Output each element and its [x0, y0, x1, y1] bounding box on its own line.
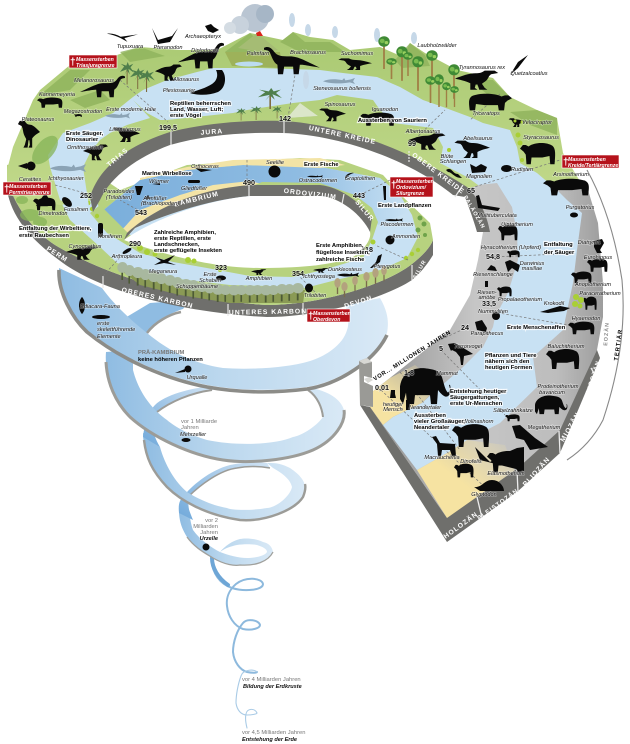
event captions: erste Reptilien, erste: [154, 236, 212, 242]
species labels: Diplodocus: [191, 48, 219, 54]
event captions: Säugergattungen,: [450, 395, 500, 401]
volcano with smoke: [224, 4, 417, 118]
spiral captions: vor 1 Milliarde: [181, 419, 217, 425]
grey Tertiary land: [370, 180, 603, 518]
species labels: Liliensternus: [109, 127, 141, 133]
species labels: Albertosaurus: [405, 129, 440, 135]
mass extinction tag: Trias/Jura: †: [70, 57, 76, 68]
upper land mass with mountains: [7, 32, 587, 210]
species labels: Anoplotherium: [574, 282, 611, 288]
mass extinction tag: Perm/Trias: [3, 182, 51, 196]
yellow-green bushes: [86, 200, 420, 272]
period labels on ribbons: TERTIÄR: [613, 328, 624, 361]
species labels: Melanorosaurus: [74, 78, 114, 84]
event captions: Erste Amphibien,: [316, 243, 364, 249]
green scrub at left: [16, 131, 63, 227]
species labels: Schaben: [199, 278, 221, 284]
mass extinction tag: Ordovizium/Silur: Silurgrenze: [396, 191, 424, 197]
age numbers: 323: [215, 263, 227, 272]
lower spiral: thin tail to the origin of the Earth: [212, 558, 263, 728]
species labels: Macrauchenia: [424, 455, 460, 461]
lower spiral: third ring, back and front: [143, 433, 305, 520]
species labels: Mensch: [383, 407, 403, 413]
species labels: Urzelle: [200, 536, 218, 542]
age numbers: 24: [461, 323, 469, 332]
species labels: Diatryma: [578, 240, 600, 246]
event captions: vieler Großsäuger,: [414, 419, 465, 425]
age numbers: 54,8: [486, 252, 500, 261]
species labels: Plesiosaurier: [163, 88, 196, 94]
age numbers: 418: [361, 245, 373, 254]
event captions: Erste Säuger,: [66, 131, 103, 137]
species labels: Ornithosuchus: [67, 145, 103, 151]
inner ring land strip: [90, 182, 378, 277]
mass extinction tag: Kreide/Tertiär: [562, 155, 619, 169]
event captions: erste Ur-Menschen: [450, 401, 503, 407]
species labels: Erste: [203, 272, 217, 278]
silhouettes: Tertiary animals: [390, 195, 608, 491]
species labels: Arsinoitherium: [552, 172, 589, 178]
event captions: Erste Menschenaffen: [507, 325, 566, 331]
mass extinction tag: Oberdevon: Oberdevon: [313, 317, 340, 323]
species labels: Baluchitherium: [548, 344, 585, 350]
lower spiral: first ring, back and front: [59, 268, 388, 392]
main ring ribbon: Perm to Silur: [7, 176, 433, 317]
event captions: nähern sich den: [485, 359, 530, 365]
species labels: Abelisaurus: [462, 136, 493, 142]
age numbers: 443: [353, 191, 365, 200]
species labels: Trilobiten: [304, 293, 326, 299]
species labels: Propalaeotherium: [498, 297, 542, 303]
mass extinction tag: Perm/Trias: †: [4, 184, 10, 195]
period labels on ribbons: SILUR: [412, 259, 428, 280]
species labels: Brachiosaurus: [290, 50, 326, 56]
event captions: der Säuger: [544, 250, 575, 256]
species labels: Gliedfüßer: [181, 186, 208, 192]
farm fields and lake: [225, 52, 282, 68]
species labels: Multituberculata: [477, 213, 517, 219]
deciduous trees: [378, 36, 460, 107]
age numbers: 5: [439, 344, 443, 353]
species labels: Meganeura: [149, 269, 177, 275]
lower spiral: fourth ring: [179, 500, 273, 565]
species labels: Dimetrodon: [39, 211, 67, 217]
species labels: Dunkleosteus: [328, 267, 362, 273]
species labels: Cynognathus: [69, 244, 102, 250]
event captions: Aussterben von Sauriern: [358, 118, 427, 124]
species labels: Seelilie: [266, 160, 284, 166]
age numbers: 199,5: [159, 123, 177, 132]
age numbers: 354: [292, 269, 304, 278]
species labels: Iguanodon: [372, 107, 398, 113]
period labels on ribbons: [45, 125, 624, 541]
mass extinction tag: Ordovizium/Silur: Ordovizium/: [396, 185, 427, 191]
species labels: Tupuxuara: [117, 44, 143, 50]
species labels: Ichthyosaurier: [48, 176, 85, 182]
species labels: Armfüßer: [142, 196, 168, 202]
age numbers: 0,01: [375, 383, 389, 392]
species labels: Koniferen: [98, 234, 122, 240]
spiral captions: Jahren: [200, 530, 218, 536]
species labels: Megatherium: [528, 425, 561, 431]
species labels: Velociraptor: [522, 120, 553, 126]
epoch strips wall: [360, 350, 600, 542]
spiral captions: vor 4,5 Milliarden Jahren: [242, 730, 305, 736]
spiral captions: vor 4 Milliarden Jahren: [242, 677, 301, 683]
species labels: bavaricum: [539, 390, 565, 396]
event captions: Dinosaurier: [66, 137, 99, 143]
event captions: Landschnecken,: [154, 242, 200, 248]
species labels: Triceratops: [472, 111, 500, 117]
event captions: Zahlreiche Amphibien,: [154, 230, 216, 236]
Devon trees: [334, 266, 387, 297]
mass extinction tag: Oberdevon: [307, 309, 351, 323]
species labels: Dinofelis: [460, 459, 482, 465]
event captions: zahlreiche Fische: [316, 257, 365, 263]
event captions: Pflanzen und Tiere: [485, 353, 537, 359]
period labels on ribbons: VOR... MILLIONEN JAHREN: [373, 330, 452, 383]
species labels: Wollnashorn: [462, 419, 494, 425]
upper sea: [48, 68, 582, 470]
spiral captions: Entstehung der Erde: [242, 737, 297, 743]
age numbers: 33,5: [482, 299, 496, 308]
species labels: Ceratites: [19, 177, 41, 183]
species labels: Ammoniten: [391, 234, 420, 240]
species labels: Plateosaurus: [22, 117, 55, 123]
species labels: Laubholzwälder: [417, 43, 458, 49]
period labels on ribbons: HOLOZÄN: [442, 510, 480, 541]
period labels on ribbons: ORDOVIZIUM: [283, 188, 337, 201]
species labels: Archaeopteryx: [184, 34, 221, 40]
species labels: Purgatorius: [566, 205, 595, 211]
species labels: Hyracotherium (Urpferd): [481, 245, 541, 251]
species labels: Darwinius: [520, 261, 544, 267]
main ring sea: [50, 165, 418, 288]
mass extinction tag: Perm/Trias: Permtriasgrenze: [9, 190, 50, 196]
silhouettes: main ring animals: [33, 166, 403, 292]
species labels: Blüte: [441, 154, 453, 160]
period labels on ribbons: PLIOZÄN: [521, 455, 552, 488]
event captions: erste geflügelte Insekten: [154, 248, 222, 254]
hole in spiral: [124, 196, 370, 268]
age numbers: 142: [279, 114, 291, 123]
period labels on ribbons: PERM: [45, 245, 69, 264]
species labels: Kannemeyeria: [39, 92, 75, 98]
event captions: Marine Wirbellose: [142, 171, 192, 177]
mass extinction tag: Kreide/Tertiär: †: [563, 157, 569, 168]
spiral captions: Jahren: [181, 425, 199, 431]
period labels on ribbons: TRIAS: [106, 147, 130, 169]
dashed leader lines: [55, 75, 568, 492]
period labels on ribbons: UNTERE KREIDE: [308, 125, 377, 146]
spiral captions: keine höheren Pflanzen: [138, 357, 203, 363]
spiral captions: Milliarden: [193, 524, 218, 530]
event captions: Land, Wasser, Luft;: [170, 107, 223, 113]
period labels on ribbons: KAMBRIUM: [174, 191, 220, 208]
species labels: Magnolien: [466, 174, 492, 180]
species labels: [19, 34, 621, 542]
mass extinction tag: Ordovizium/Silur: Massensterben: [396, 179, 434, 185]
Tertiär arc: [567, 170, 623, 460]
species labels: Rudisten: [511, 167, 533, 173]
forest: Schuppenbäume: [117, 262, 305, 303]
mass extinction tag: Trias/Jura: Triasjuragrenze: [76, 63, 115, 69]
period labels on ribbons: PLEISTOZÄN: [476, 488, 520, 522]
period labels on ribbons: OBERE KREIDE: [410, 152, 465, 196]
event captions: Reptilien beherrschen: [170, 101, 231, 107]
species labels: amöbe: [478, 295, 496, 301]
period labels on ribbons: OBERES KARBON: [121, 287, 194, 310]
plant cluster at Paraceratherium: [447, 120, 584, 308]
age numbers: 99: [408, 139, 416, 148]
inner ribbon: Kambrium to Silur: [124, 185, 372, 240]
mass extinction tag: Oberdevon: Massensterben: [313, 311, 351, 317]
species labels: Graptolithen: [345, 176, 375, 182]
event captions: [19, 101, 575, 431]
mountains: [40, 32, 557, 135]
species labels: Palmfarn: [247, 51, 269, 57]
species labels: Placodermen: [381, 222, 413, 228]
period labels on ribbons: DEVON: [344, 295, 373, 310]
species labels: Pterygotus: [374, 264, 401, 270]
species labels: Terrorvogel: [454, 344, 483, 350]
spiral captions: [138, 349, 305, 743]
species labels: Krokodil: [544, 301, 565, 307]
pillar at sector edge: [359, 358, 373, 407]
event captions: Erste Fische: [304, 162, 339, 168]
event captions: Entstehung heutiger: [450, 389, 507, 395]
species labels: erste: [97, 321, 109, 327]
species labels: Arthropleura: [111, 254, 142, 260]
period labels on ribbons: OLIGOZÄN: [583, 360, 602, 399]
spiral captions: PRÄ-KAMBRIUM: [138, 349, 185, 356]
species labels: Elemente: [97, 334, 121, 340]
species labels: Tyrannosaurus rex: [459, 65, 505, 71]
mass extinction tag: Ordovizium/Silur: [390, 177, 434, 197]
species labels: (Trilobiten): [106, 195, 132, 201]
species labels: heutiger: [383, 402, 404, 408]
species labels: Orthoceras: [191, 164, 219, 170]
extra green shrubs: Silur: [416, 216, 427, 237]
silhouettes: upper land animals: [18, 24, 589, 195]
period labels on ribbons: EOZÄN: [602, 322, 611, 346]
inner sea, darker: [100, 165, 408, 230]
species labels: Paraceratherium: [579, 291, 621, 297]
species labels: Neandertaler: [409, 405, 442, 411]
period labels on ribbons: SILUR: [353, 199, 375, 223]
species labels: Fusulinen: [64, 207, 88, 213]
species labels: Ostracodermen: [299, 178, 337, 184]
inner ring beach: [120, 158, 345, 236]
age numbers: [80, 114, 500, 392]
age numbers: 290: [129, 239, 141, 248]
species labels: Schlangen: [440, 159, 466, 165]
age numbers: 252: [80, 191, 92, 200]
mass extinction tag: Oberdevon: †: [308, 311, 314, 322]
species labels: Pteranodon: [154, 45, 182, 51]
species labels: Urqualle: [187, 375, 207, 381]
period labels on ribbons: PALÄOZÄN: [462, 194, 487, 230]
species labels: (Brachiopoden): [141, 201, 179, 207]
species labels: Megazostrodon: [64, 109, 102, 115]
event captions: Erste Landpflanzen: [378, 203, 432, 209]
period labels on ribbons: UNTERES KARBON: [229, 308, 307, 317]
mass extinction tag: Kreide/Tertiär: Massensterben: [568, 157, 606, 163]
main ring land: [7, 150, 433, 305]
species labels: Quetzalcoatlus: [510, 71, 548, 77]
species labels: Suchomimus: [341, 51, 373, 57]
species labels: Riesen-: [477, 290, 497, 296]
species labels: Allosaurus: [172, 77, 199, 83]
species labels: Uintatherium: [501, 222, 533, 228]
spiral captions: Bildung der Erdkruste: [243, 684, 302, 690]
mass extinction tag: Ordovizium/Silur: †: [391, 180, 397, 191]
species labels: skelettführende: [97, 327, 135, 333]
upper ribbon: Trias to Paläozän: [90, 121, 490, 232]
event captions: erste Raubechsen: [19, 233, 69, 239]
mass extinction tag: Trias/Jura: [69, 55, 117, 69]
mass extinction tag: Kreide/Tertiär: Kreide/Tertiärgrenze: [568, 163, 618, 169]
event captions: Aussterben: [414, 413, 446, 419]
species labels: Nummuliten: [478, 309, 508, 315]
species labels: Riesenschlange: [473, 272, 513, 278]
species labels: Styracosaurus: [523, 135, 559, 141]
mass extinction tag: Perm/Trias: Massensterben: [9, 184, 47, 190]
yellow coast: Holocene: [370, 365, 440, 425]
species labels: Paradoxides: [103, 189, 135, 195]
age numbers: 490: [243, 178, 255, 187]
event captions: Entfaltung: [544, 242, 573, 248]
period labels on ribbons: JURA: [200, 128, 223, 137]
period labels on ribbons: MIOZÄN: [559, 411, 582, 443]
event captions: flügellose Insekten,: [316, 250, 370, 256]
species labels: Glyptodon: [471, 492, 497, 498]
species labels: Mehrzeller: [180, 432, 207, 438]
event captions: Entfaltung der Wirbeltiere,: [19, 226, 92, 232]
event captions: Neandertaler: [414, 425, 450, 431]
event captions: heutigen Formen: [485, 365, 532, 371]
species labels: Säbelzahnkatze: [493, 408, 533, 414]
age numbers: 543: [135, 208, 147, 217]
species labels: masillae: [522, 266, 542, 272]
spiral captions: vor 2: [205, 518, 218, 524]
species labels: Spinosaurus: [324, 102, 356, 108]
species labels: Mammut: [436, 371, 458, 377]
species labels: Parapithecus: [471, 331, 504, 337]
species labels: Ichthyostega: [303, 274, 335, 280]
pre-Cambrian fossils: [79, 297, 210, 550]
age numbers: 65: [467, 186, 475, 195]
species labels: Schuppenbäume: [176, 284, 218, 290]
palms: [120, 62, 282, 120]
species labels: Hyaenodon: [572, 316, 600, 322]
mass extinction tag: Trias/Jura: Massensterben: [76, 57, 114, 63]
age numbers: 1,8: [404, 368, 414, 377]
yellow coast: Pleistocene: [417, 440, 517, 518]
lower spiral: second ring, back and front: [106, 350, 344, 462]
species labels: Steneosaurus bollensis: [313, 86, 371, 92]
species labels: Erste moderne Haie: [106, 107, 156, 113]
species labels: Elasmotherium: [487, 471, 525, 477]
species labels: Ediacara-Fauna: [80, 304, 120, 310]
species labels: Eurohippus: [584, 255, 612, 261]
species labels: Prodeinotherium: [537, 384, 579, 390]
event captions: erste Vögel: [170, 113, 202, 119]
species labels: Würmer: [149, 179, 170, 185]
species labels: Amphibien: [245, 276, 272, 282]
